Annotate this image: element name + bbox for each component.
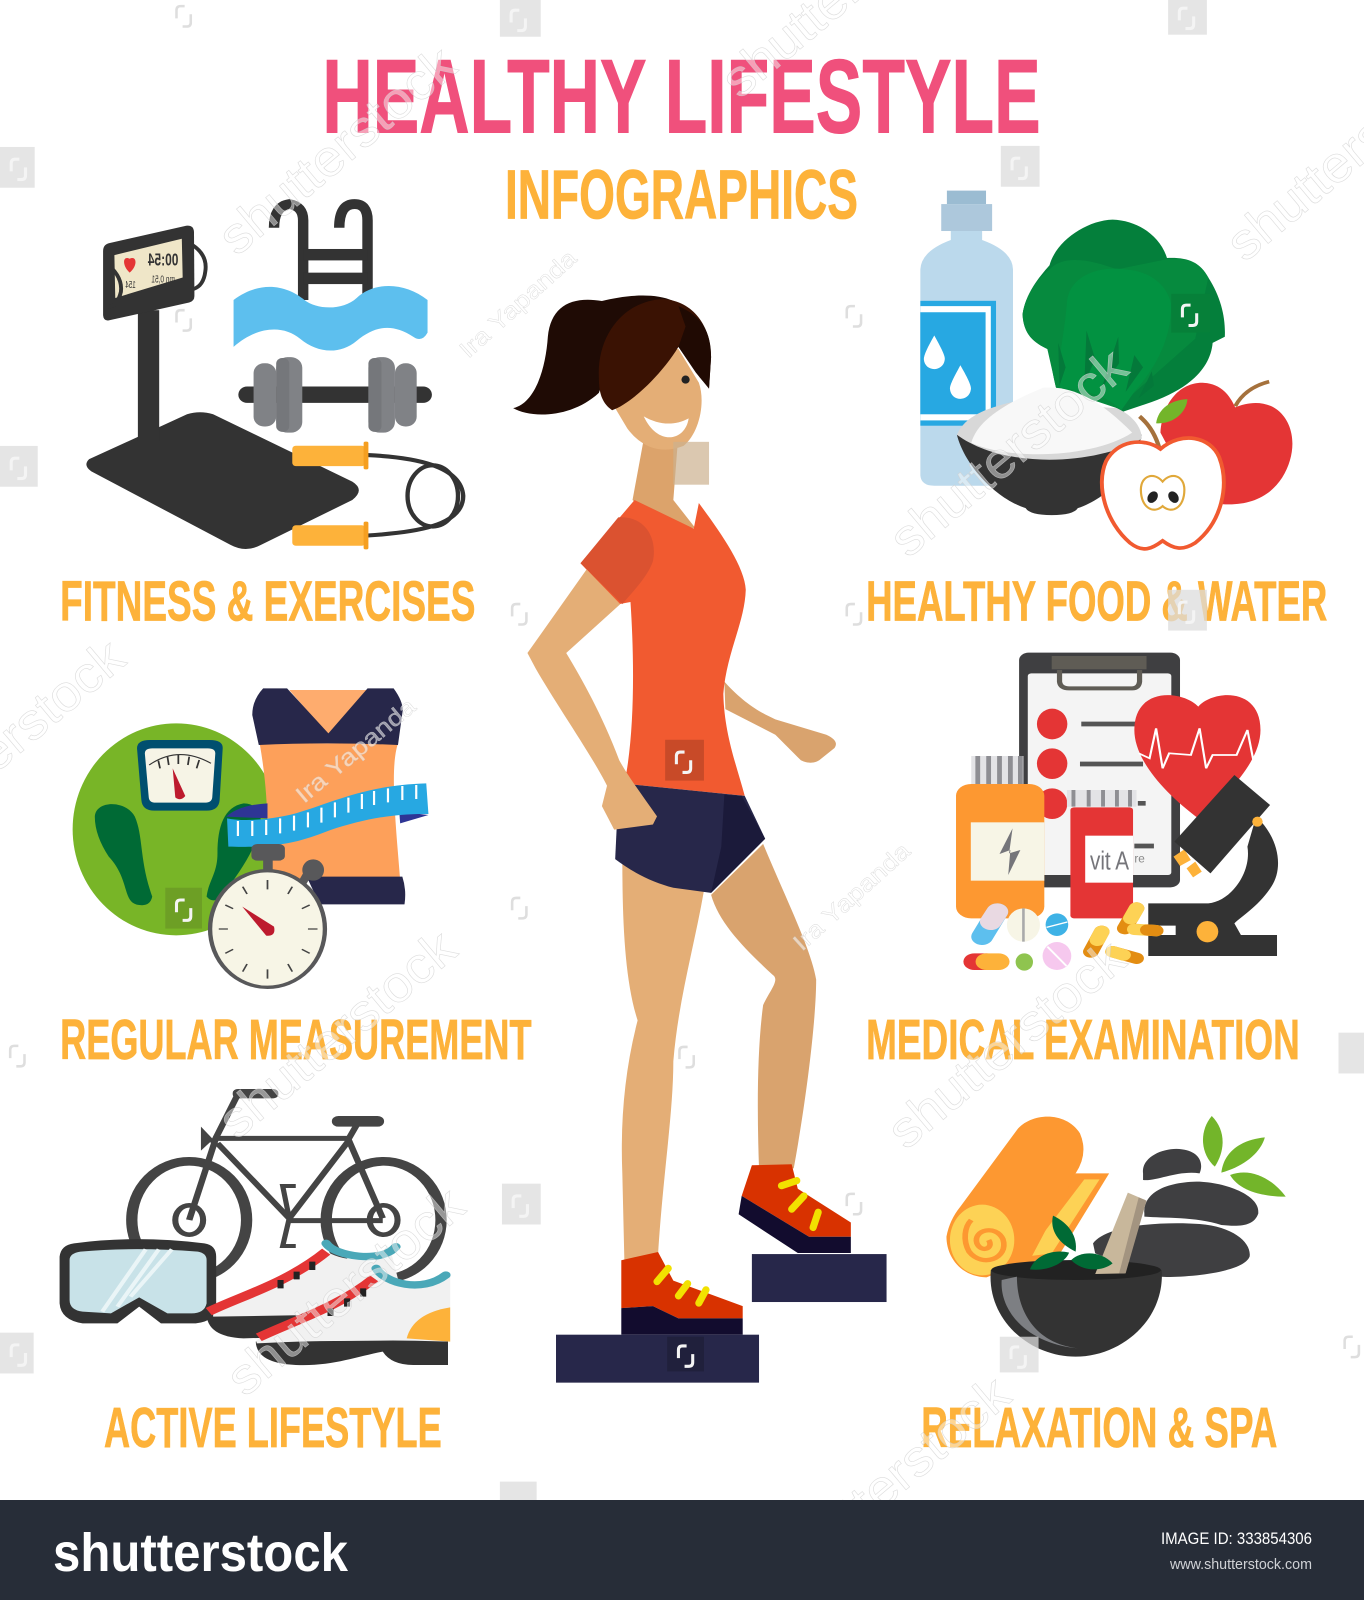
smile: [644, 416, 689, 437]
icon: green leaves: [1203, 1116, 1286, 1197]
panel: woman stepping up: [513, 296, 887, 1383]
icon: mortar and pestle: [991, 1193, 1162, 1357]
icon: lettuce: [1023, 220, 1225, 412]
icon: torso with top and shorts: [252, 688, 405, 904]
sleeve shading: [580, 517, 654, 604]
panel: regular measurement icons: [73, 688, 428, 987]
icon: step platforms: [556, 1254, 887, 1383]
eye: [681, 376, 690, 384]
label: fitness: FITNESS & EXERCISES: [60, 569, 475, 632]
icon: treadmill: 00:54: [147, 249, 178, 269]
watermark text: shutterstock: [876, 929, 1136, 1159]
watermark text: Ira Yapanda: [788, 837, 916, 956]
icon: microscope: [1148, 775, 1278, 956]
ponytail hair: [513, 296, 673, 415]
watermark text: shutterstock: [215, 1175, 475, 1406]
icon: jump rope: [292, 442, 463, 549]
icon: spa stones: [1093, 1149, 1258, 1277]
icon: water bottle: [920, 191, 1013, 486]
website: www.shutterstock.com: [1169, 1556, 1312, 1573]
icon: rolled towel: [946, 1117, 1109, 1277]
icon: back sneaker: [207, 1243, 407, 1338]
standing leg: [622, 857, 704, 1260]
watermark text: shutterstock: [878, 337, 1138, 568]
watermark text: Ira Yapanda: [454, 244, 582, 363]
icon: stopwatch: [210, 844, 325, 987]
label: active: ACTIVE LIFESTYLE: [104, 1396, 442, 1459]
icon: front sneaker: [256, 1268, 450, 1365]
icon: red vitamin bottle: [1067, 790, 1145, 918]
icon: heart with pulse: [1134, 695, 1260, 818]
panel: medical examination icons: [956, 653, 1278, 971]
icon: clipboard: [1019, 653, 1180, 887]
icon: treadmill: 154: [125, 280, 136, 291]
watermark text: Ira Yapanda: [291, 692, 421, 808]
watermark text: shutterstock: [761, 1364, 1021, 1595]
panel: relaxation and spa icons: [946, 1116, 1286, 1357]
neck: [633, 434, 696, 529]
label: measurement: REGULAR MEASUREMENT: [60, 1008, 532, 1071]
icon: cut apple: [1102, 416, 1224, 549]
shorts: [615, 784, 765, 893]
icon: pool ladder and water: [234, 204, 428, 351]
footer bar: [0, 1500, 1364, 1600]
image id: IMAGE ID: 333854306: [1161, 1529, 1312, 1548]
face: [602, 347, 702, 450]
near arm: [527, 569, 657, 830]
shirt: [580, 500, 746, 796]
icon: whole apple: [1156, 382, 1292, 504]
icon: dumbbell: [238, 357, 432, 433]
icon: measuring tape: [226, 783, 428, 847]
icon: rice bowl: [957, 388, 1142, 515]
icon: orange pill bottle: [956, 756, 1044, 918]
icon: red vitamin bottle: re: [1134, 851, 1145, 865]
watermark text: shutterstock: [207, 918, 467, 1149]
icon: pills and capsules: [974, 908, 1156, 971]
icon: goggles: [60, 1239, 216, 1323]
icon: red vitamin bottle: vit A: [1090, 847, 1130, 875]
icon: bicycle: [132, 1089, 441, 1279]
icon: treadmill: mn 0,51: [151, 275, 175, 285]
subtitle: INFOGRAPHICS: [505, 155, 858, 233]
panel: healthy food and water icons: [920, 191, 1292, 549]
front hair: [599, 299, 711, 410]
icon: treadmill: [86, 226, 359, 549]
panel: fitness and exercises icons: [86, 204, 463, 549]
watermark text: shutterstock: [207, 35, 467, 266]
upper shoe: [739, 1164, 851, 1253]
footer logo wordmark: shutterstock: [53, 1523, 349, 1583]
lower shoe: [621, 1252, 743, 1335]
panel: active lifestyle icons: [60, 1089, 450, 1365]
far arm: [724, 682, 836, 763]
icon: bathroom scale: [73, 723, 280, 935]
raised leg: [711, 844, 816, 1168]
